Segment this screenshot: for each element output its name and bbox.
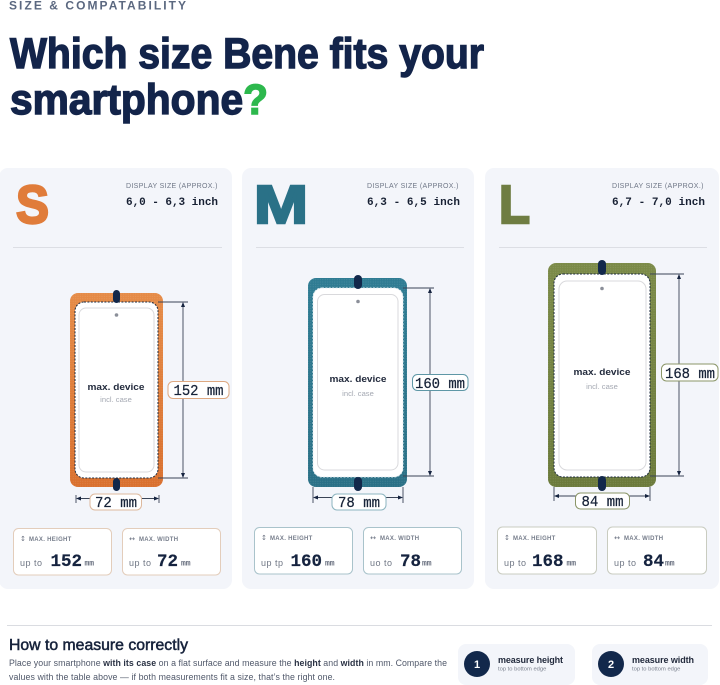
display size M <box>367 183 460 209</box>
max height box S: ↕ <box>20 535 26 543</box>
height dimension M <box>403 288 468 476</box>
max width box M: 78 <box>400 552 421 572</box>
step 2 chip <box>592 644 708 685</box>
title: smartphone? <box>10 76 268 124</box>
width dimension L <box>554 487 650 511</box>
max height box M <box>254 528 352 574</box>
device diagram L: incl. case <box>586 382 618 391</box>
max width box S <box>122 528 220 575</box>
max width box S: up to <box>129 558 152 568</box>
max width box M: ↔ <box>370 534 376 542</box>
display size M: DISPLAY SIZE (APPROX.) <box>367 183 459 190</box>
title: Which size Bene fits your <box>10 30 484 78</box>
max height box S: MAX. HEIGHT <box>29 537 72 543</box>
step 2 chip: top to bottom edge <box>632 666 680 672</box>
size letter M: M <box>254 175 308 235</box>
max width box S: 72 <box>157 552 178 572</box>
device diagram S: incl. case <box>100 395 132 404</box>
max width box L: MAX. WIDTH <box>624 536 663 542</box>
max width box M: MAX. WIDTH <box>380 536 419 542</box>
step 2 chip: measure width <box>632 655 694 665</box>
height dimension M: 160 mm <box>415 376 465 393</box>
max width box L: 84 <box>643 552 664 572</box>
max height box L: 168 <box>532 552 564 572</box>
step 2 chip: 2 <box>608 659 614 671</box>
max width box S: ↔ <box>129 535 135 543</box>
device diagram S: max. device <box>88 381 144 392</box>
width dimension M <box>313 487 403 512</box>
display size S <box>126 183 218 209</box>
max height box M: ↕ <box>261 534 267 542</box>
display size L: 6,7 - 7,0 inch <box>612 197 705 209</box>
measuring instructions <box>9 658 447 682</box>
device diagram M: incl. case <box>342 389 374 398</box>
max height box S <box>14 528 112 575</box>
width dimension L: 84 mm <box>582 494 624 511</box>
max width box M <box>364 528 462 574</box>
display size S: 6,0 - 6,3 inch <box>126 197 218 209</box>
device diagram L <box>548 260 656 491</box>
max width box M: uo to <box>370 558 393 568</box>
max width box L: mm <box>665 560 675 568</box>
max height box M: MAX. HEIGHT <box>270 536 313 542</box>
device diagram S <box>70 290 163 491</box>
device diagram L: max. device <box>574 366 630 377</box>
display size M: 6,3 - 6,5 inch <box>367 197 460 209</box>
max width box S: mm <box>181 560 191 568</box>
device diagram M: max. device <box>330 373 386 384</box>
title <box>10 30 484 124</box>
height dimension L <box>650 274 718 476</box>
measuring instructions: values with the table above — if both measurements fit a size, that’s the right one. <box>9 672 335 682</box>
max width box M: mm <box>422 560 432 568</box>
step 1 chip: top to bottom edge <box>498 666 546 672</box>
max height box L: mm <box>566 560 576 568</box>
max height box S: 152 <box>50 552 82 572</box>
max height box L: ↕ <box>504 534 510 542</box>
max height box S: up to <box>20 558 43 568</box>
display size S: DISPLAY SIZE (APPROX.) <box>126 183 218 190</box>
height dimension S <box>158 302 229 478</box>
size letter L: L <box>499 175 530 235</box>
height dimension L: 168 mm <box>665 366 715 383</box>
display size L <box>612 183 705 209</box>
device diagram M <box>308 275 407 491</box>
max width box S: MAX. WIDTH <box>139 537 178 543</box>
size letter S: S <box>16 175 49 235</box>
width dimension S <box>76 494 159 512</box>
max height box L: MAX. HEIGHT <box>513 536 556 542</box>
max height box S: mm <box>84 560 94 568</box>
step 1 chip <box>458 644 575 685</box>
height dimension S: 152 mm <box>174 383 224 400</box>
panel: size S <box>0 168 232 589</box>
max width box L <box>608 527 706 574</box>
step 1 chip: 1 <box>474 659 480 671</box>
max height box M: 160 <box>290 552 322 572</box>
max height box L: up to <box>504 558 527 568</box>
width dimension S: 72 mm <box>95 495 137 512</box>
step 1 chip: measure height <box>498 655 563 665</box>
display size L: DISPLAY SIZE (APPROX.) <box>612 183 704 190</box>
max height box L <box>498 527 596 574</box>
measuring instructions: Place your smartphone with its case on a flat surface and measure the height and width in mm. Compare the <box>9 658 447 668</box>
panel: size L <box>485 168 719 589</box>
width dimension M: 78 mm <box>338 495 380 512</box>
max height box M: up tp <box>261 558 284 568</box>
heading: how to measure: How to measure correctly <box>9 637 188 654</box>
panel: size M <box>242 168 474 589</box>
max width box L: ↔ <box>614 534 620 542</box>
max width box L: up to <box>614 558 637 568</box>
max height box M: mm <box>325 560 335 568</box>
